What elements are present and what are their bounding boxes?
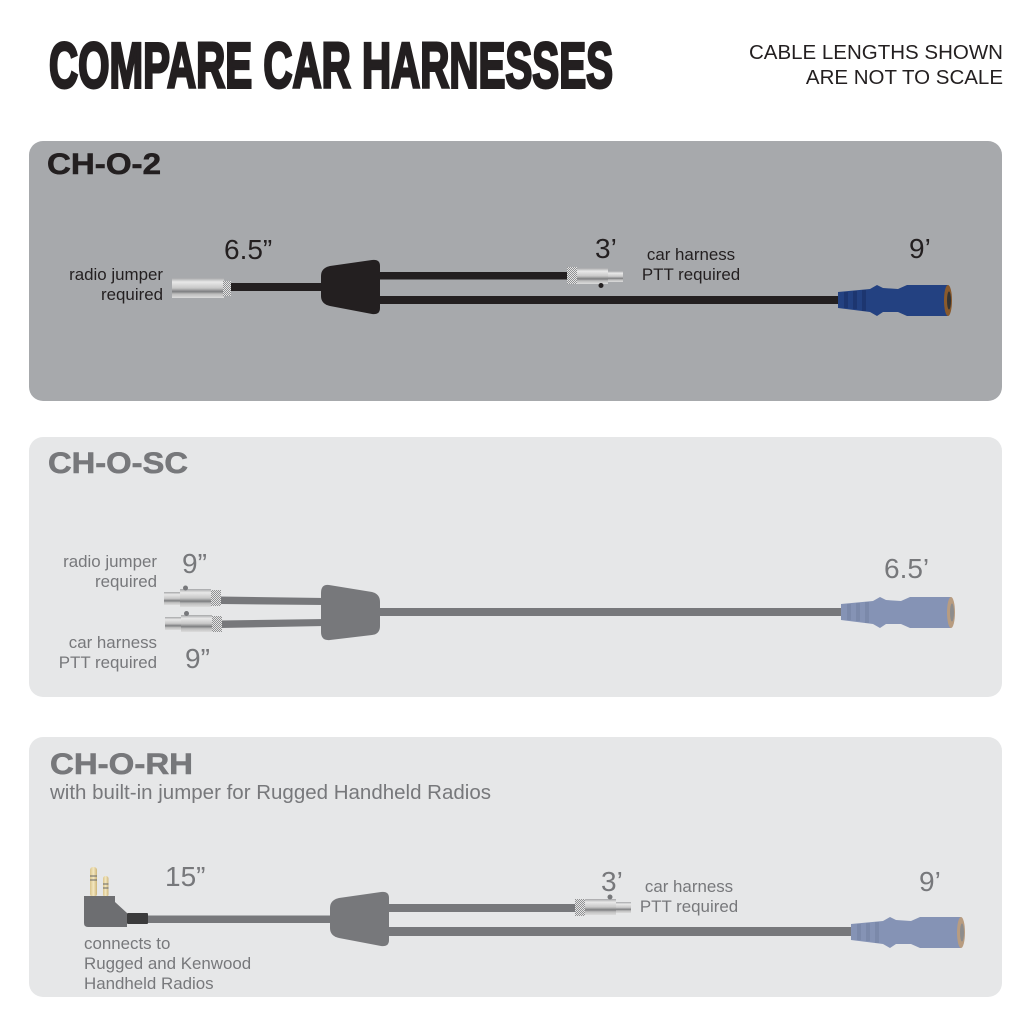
splitter [321,260,380,314]
connector: car harness [165,611,222,632]
labels: 9’ [909,233,931,264]
labels: 9” [182,548,207,579]
icon: two-pin radio plug [84,867,148,927]
labels: 6.5” [224,234,272,265]
labels: 6.5’ [884,553,929,584]
subheading: with built-in jumper for Rugged Handheld Radios [49,781,491,804]
connector: radio jumper [172,278,231,298]
labels: PTT required [59,653,157,672]
plug: muted blue [851,917,965,948]
connector: radio jumper [164,586,221,607]
labels: 9’ [919,866,941,897]
scale note: ARE NOT TO SCALE [806,66,1003,89]
splitter [330,892,389,946]
panel: CH-O-RH [29,737,1002,997]
panel: CH-O-SC [29,437,1002,697]
labels: Rugged and Kenwood [84,954,251,973]
scale note [749,41,1003,89]
labels: connects to [84,934,170,953]
labels: car harness [69,633,157,652]
labels: PTT required [642,265,740,284]
labels: 15” [165,861,205,892]
connector: car harness [575,894,631,916]
connector: car harness [567,267,623,288]
labels: PTT required [640,897,738,916]
cables [148,904,853,936]
labels: 3’ [601,866,623,897]
plug: blue [838,285,952,316]
labels [84,861,941,993]
plug: muted blue [841,597,955,628]
cables [220,596,843,628]
heading: CH-O-RH: CH-O-RH [50,748,193,781]
heading: CH-O-2: CH-O-2 [47,148,161,181]
labels [69,233,931,304]
cables [230,272,840,304]
labels: car harness [645,877,733,896]
scale note: CABLE LENGTHS SHOWN [749,41,1003,64]
labels: required [101,285,163,304]
labels: 3’ [595,233,617,264]
panel: CH-O-2 [29,141,1002,401]
title: COMPARE CAR HARNESSES [49,30,613,102]
labels [59,548,929,674]
splitter [321,585,380,640]
labels: 9” [185,643,210,674]
labels: radio jumper [63,552,157,571]
labels: Handheld Radios [84,974,214,993]
heading: CH-O-SC: CH-O-SC [48,447,188,480]
labels: car harness [647,245,735,264]
labels: radio jumper [69,265,163,284]
labels: required [95,572,157,591]
